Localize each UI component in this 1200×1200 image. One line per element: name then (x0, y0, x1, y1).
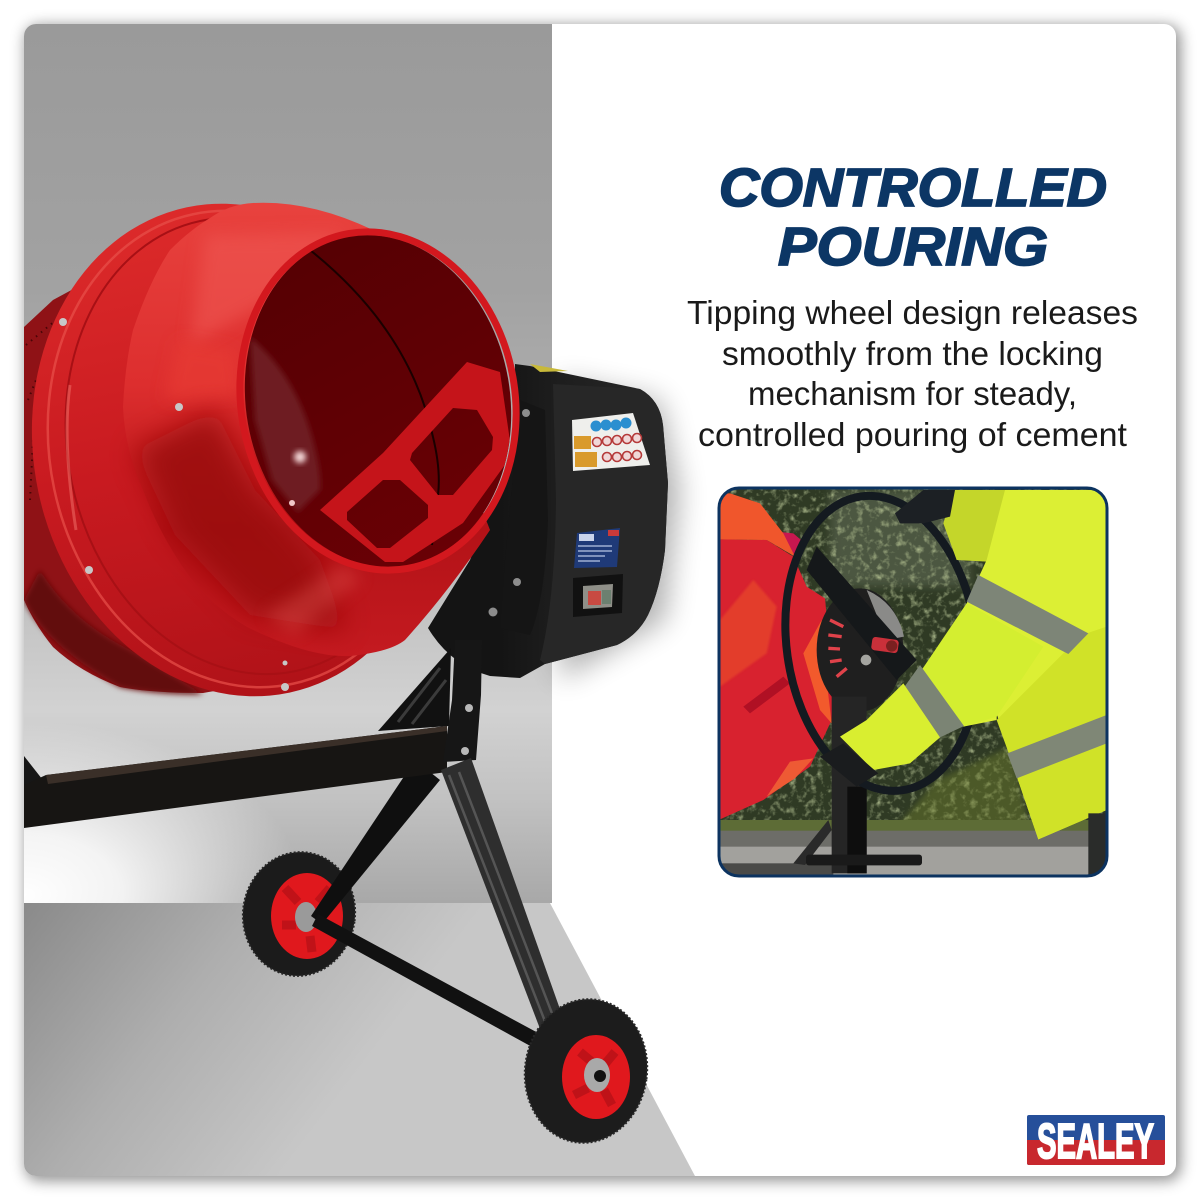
studio wall background (24, 24, 552, 903)
left wheel (242, 851, 356, 977)
drum flange (32, 204, 367, 696)
description text: controlled pouring of cement (698, 416, 1127, 453)
rear drum section (24, 280, 220, 694)
grass, kerb and road (717, 820, 1107, 877)
heading (719, 158, 1107, 277)
interior seam (310, 250, 439, 545)
drum rivets (59, 318, 289, 691)
gloves (820, 743, 878, 787)
vertical column (447, 658, 482, 762)
description text: mechanism for steady, (748, 375, 1077, 412)
rear left bracket (24, 756, 41, 785)
horizontal beam (24, 726, 447, 828)
gearbox housing (428, 364, 668, 678)
rating plate (574, 528, 620, 568)
heading: POURING (778, 217, 1048, 277)
cross bar (312, 914, 540, 1048)
reflective bands (967, 575, 1088, 654)
interior reflection (250, 337, 320, 512)
soft shadow of the gearbox (560, 380, 680, 680)
description text: Tipping wheel design releases (687, 294, 1138, 331)
bolts on the housing (488, 409, 530, 616)
trousers (1088, 813, 1107, 877)
drum interior (244, 235, 512, 567)
inset photo: worker tipping the mixer (717, 483, 1107, 877)
description text (687, 294, 1138, 453)
right wheel (524, 998, 648, 1144)
hi-vis coat (820, 490, 1107, 877)
gusset bracket (378, 648, 451, 731)
panel: product photo (0, 24, 695, 1176)
red drum (720, 493, 833, 819)
photo frame (719, 488, 1107, 876)
tipping wheel ring (781, 492, 972, 795)
right leg (441, 758, 561, 1034)
sleeve cuff (840, 683, 940, 770)
heading: CONTROLLED (719, 158, 1107, 218)
drum mouth rim (236, 228, 520, 574)
power switch (573, 574, 623, 617)
drum highlights (67, 232, 362, 635)
studio floor background (24, 903, 695, 1176)
safety sticker (572, 413, 650, 471)
foliage background (717, 487, 1107, 827)
wheel support post (793, 697, 922, 873)
left strut (311, 774, 440, 920)
description text: smoothly from the locking (722, 335, 1103, 372)
wheel arm and handle (807, 547, 917, 680)
drum cone (123, 203, 490, 656)
column bolts (461, 704, 473, 755)
mixing paddle (320, 362, 512, 562)
tipping wheel disc (817, 588, 904, 712)
mixer stand (24, 640, 656, 1151)
cement drum (24, 202, 520, 699)
